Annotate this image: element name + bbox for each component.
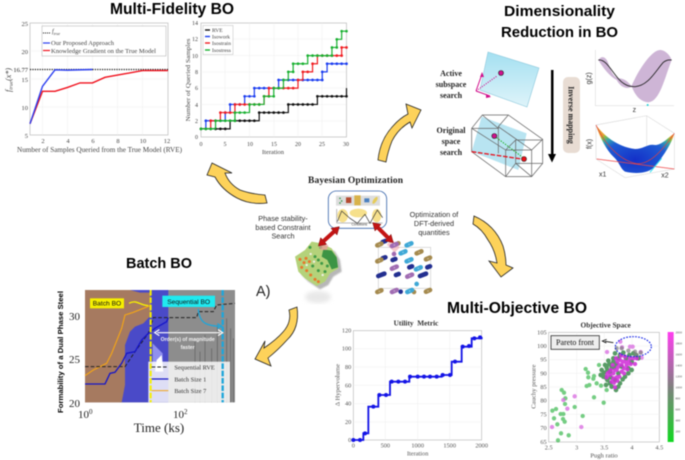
chart: objective space scatter: 65 [540, 439, 547, 446]
chart: utility metric [335, 318, 488, 458]
title: Bayesian Optimization: Bayesian Optimization [308, 176, 404, 186]
chart: objective space scatter: 90 [540, 370, 547, 377]
colorbar: 1200 [675, 374, 682, 378]
chart: f_true versus samples queried: 25 [22, 21, 28, 28]
legend: batch chart: Batch Size 7 [174, 388, 206, 395]
chart: g(z) with uncertainty band: g(z) [586, 72, 593, 84]
legend: f_true chart [42, 26, 166, 56]
chart: f_true versus samples queried: true [8, 80, 14, 90]
chart: number of queried samples: 0 [200, 142, 202, 148]
chart: formability over time: Formability of a Dual Phase Steel [56, 291, 65, 413]
colorbar: 1400 [675, 364, 682, 368]
text: optimization of DFT-derived quantities: quantities [418, 228, 450, 237]
text: order of magnitude faster: Order(s) of magnitude [161, 337, 215, 343]
chart: number of queried samples: 12 [192, 37, 198, 43]
colorbar: 600 [675, 407, 681, 411]
chart: f(x) surface: f(x) [587, 139, 594, 149]
chart: utility metric: Iteration [407, 451, 429, 458]
chart: f_true versus samples queried: 6 [91, 138, 95, 145]
box: inverse mapping: Inverse mapping [566, 86, 576, 144]
legend: queried samples chart: RVE [212, 28, 223, 34]
label: Sequential BO tag: Sequential BO [167, 299, 210, 306]
label: A): A) [256, 284, 270, 300]
label: original space search: Original [437, 126, 466, 135]
chart: f(x) surface: x1 [599, 171, 606, 178]
arrow: Pareto callout pointer [602, 339, 613, 343]
chart: formability over time [56, 290, 235, 435]
chart: number of queried samples: Number of Queried Samples [185, 38, 192, 122]
chart: number of queried samples: 5 [224, 142, 226, 148]
chart: objective space scatter: 75 [540, 411, 547, 418]
chart: f_true versus samples queried: 4 [66, 138, 70, 145]
text: optimization of DFT-derived quantities: DFT-derived [414, 219, 454, 228]
colorbar: 400 [675, 418, 681, 422]
chart: f(x) surface: x2 [661, 172, 669, 179]
chart: formability over time: 25 [69, 354, 80, 366]
chart: objective space scatter: 105 [537, 329, 547, 336]
legend: f_true chart: f [52, 29, 54, 35]
chart: formability over time: 30 [69, 311, 80, 323]
chart: objective space scatter: 3 [575, 444, 578, 451]
chart: f_true versus samples queried: Number of Samples Queried from the True Model (RVE) [17, 146, 183, 154]
box: inverse mapping [563, 77, 580, 153]
legend: f_true chart: Knowledge Gradient on the True Model [51, 49, 156, 55]
legend: f_true chart: Our Proposed Approach [51, 41, 114, 47]
chart: utility metric: 20 [345, 419, 351, 426]
colorbar: 1000 [675, 385, 682, 389]
chart: number of queried samples: 20 [295, 142, 301, 148]
chart: utility metric: Utility Metric [394, 318, 439, 327]
arrow: inverse mapping direction [548, 70, 556, 162]
chart: formability over time: 0 [89, 408, 93, 416]
chart: utility metric: 80 [345, 364, 351, 371]
chart: number of queried samples: 8 [195, 70, 198, 76]
title: Multi-Fidelity BO: Multi-Fidelity BO [110, 1, 234, 18]
arrow: to dimensionality reduction [378, 104, 421, 162]
text: optimization of DFT-derived quantities: Optimization of [410, 210, 459, 219]
figure: crystal structure [377, 241, 431, 292]
arrow: red double-headed to phase map [318, 227, 339, 246]
chart: utility metric: 40 [345, 401, 351, 408]
chart: utility metric: 0 [348, 437, 351, 444]
chart: formability over time: Time (ks) [134, 420, 184, 435]
callout: Pareto front: Pareto front [556, 338, 595, 347]
label: active subspace search: Active [440, 69, 462, 78]
chart: f_true versus samples queried: 20 [22, 49, 28, 56]
text: phase stability-based constraint search: Phase stability- [258, 214, 308, 223]
legend: batch chart: Sequential RVE [174, 364, 215, 371]
chart: objective space scatter: 95 [540, 357, 547, 364]
arrow: red double-headed to crystal [373, 223, 393, 243]
chart: utility metric: 2000 [475, 443, 488, 450]
chart: number of queried samples: 0 [195, 135, 198, 141]
legend: batch chart: Batch Size 1 [174, 376, 206, 383]
colorbar: 1800 [675, 341, 682, 345]
box: Bayesian optimization schematic: Conditions [351, 223, 368, 227]
chart: utility metric: Δ Hypervolume [335, 364, 342, 406]
diagram: original space cube [472, 115, 543, 177]
chart: number of queried samples: Iteration [262, 149, 285, 156]
chart: objective space scatter: 100 [537, 343, 547, 350]
diagram: active subspace plane [476, 52, 539, 107]
label: active subspace search: subspace [436, 80, 467, 89]
arrow: cyan to sequential line [198, 309, 222, 328]
chart: number of queried samples: 25 [319, 142, 325, 148]
chart: number of queried samples: 14 [192, 21, 198, 27]
arrow: to batch [255, 307, 298, 366]
chart: utility metric: 0 [352, 443, 355, 450]
chart: f_true versus samples queried: (x*) [4, 68, 13, 81]
chart: f_true versus samples queried: 5 [25, 133, 28, 140]
colorbar: 1600 [675, 353, 682, 357]
chart: number of queried samples [185, 21, 349, 156]
figure: phase stability map [295, 242, 342, 289]
chart: f_true versus samples queried: 10 [22, 105, 28, 112]
title: Dimensionality Reduction in BO: Dimensionality [504, 3, 616, 20]
label: Batch BO tag [90, 298, 124, 308]
label: active subspace search: search [440, 91, 463, 100]
chart: f_true versus samples queried: 10 [140, 138, 146, 145]
chart: number of queried samples: 10 [247, 142, 253, 148]
chart: objective space scatter: 80 [540, 398, 547, 405]
chart: number of queried samples: 15 [271, 142, 277, 148]
chart: utility metric: 1000 [411, 443, 424, 450]
callout: Pareto front [551, 336, 599, 349]
chart: f_true versus samples queried: f [4, 90, 13, 92]
legend: queried samples chart: Isowork [212, 34, 230, 40]
text: optimization of DFT-derived quantities [410, 210, 459, 237]
title: Multi-Objective BO: Multi-Objective BO [447, 300, 587, 317]
chart: f_true versus samples queried: 2 [41, 138, 45, 145]
label: active subspace search [436, 69, 467, 100]
title: Batch BO: Batch BO [126, 255, 192, 272]
chart: g(z) with uncertainty band: z [633, 107, 637, 114]
chart: g(z) with uncertainty band [586, 50, 674, 114]
chart: utility metric: 120 [342, 328, 351, 335]
data points: dense gray green cluster [601, 353, 638, 390]
chart: formability over time: 2 [184, 408, 188, 416]
chart: f_true versus samples queried: 8 [116, 138, 120, 145]
box: Bayesian optimization schematic [328, 191, 387, 228]
chart: number of queried samples: 10 [192, 54, 198, 60]
chart: formability over time: 20 [69, 398, 80, 410]
chart: objective space scatter: 70 [540, 425, 547, 432]
colorbar [668, 331, 682, 442]
chart: number of queried samples: 2 [195, 119, 198, 125]
chart: objective space scatter: Objective Space [581, 321, 632, 330]
arrow: order of magnitude span [155, 330, 223, 336]
chart: objective space scatter: 85 [540, 384, 547, 391]
chart: objective space scatter: 3.5 [600, 444, 608, 451]
text: phase stability-based constraint search: Search [271, 232, 295, 240]
text: order of magnitude faster: faster [181, 345, 195, 351]
chart: f_true versus samples queried: 12 [164, 138, 170, 145]
chart: formability over time: 10 [78, 409, 89, 421]
data points: sparse green [552, 365, 607, 440]
legend: f_true chart: true [54, 31, 60, 36]
chart: f_true versus samples queried: 16.77 [13, 67, 29, 74]
chart: number of queried samples: 30 [343, 142, 349, 148]
chart: utility metric: 1500 [443, 443, 456, 450]
legend: queried samples chart: Isostrain [212, 41, 231, 47]
chart: utility metric: 100 [342, 346, 351, 353]
legend: queried samples chart: Isostress [212, 48, 231, 54]
chart: utility metric: 500 [381, 443, 390, 450]
chart: objective space scatter: Cauchy pressure [530, 365, 537, 409]
text: phase stability-based constraint search: based Constraint [255, 223, 311, 232]
shadow: faint reflection of phase map [305, 291, 331, 303]
chart: f_true versus samples queried [4, 21, 183, 154]
legend: queried samples chart [203, 26, 233, 54]
data points: dense magenta cluster [607, 356, 637, 387]
arrow: yellow to batch line [129, 302, 148, 306]
label: Batch BO tag: Batch BO [93, 301, 121, 308]
title: Dimensionality Reduction in BO: Reduction in BO [501, 24, 618, 41]
chart: objective space scatter: 2.5 [545, 444, 553, 451]
label: original space search: search [440, 148, 463, 157]
chart: f_true versus samples queried: 15 [22, 77, 28, 84]
chart: objective space scatter [530, 321, 682, 460]
chart: number of queried samples: 4 [195, 103, 198, 109]
label: original space search [437, 126, 466, 157]
arrow: to multi-objective [473, 216, 513, 277]
chart: utility metric: 60 [345, 382, 351, 389]
chart: number of queried samples: 6 [195, 86, 198, 92]
arrow: to multi-fidelity [207, 163, 267, 203]
text: phase stability-based constraint search [255, 214, 311, 240]
label: Sequential BO tag [162, 296, 215, 307]
label: original space search: space [442, 137, 461, 146]
chart: objective space scatter: 4.5 [655, 444, 663, 451]
colorbar: 800 [675, 396, 681, 400]
colorbar: 2000 [675, 331, 682, 335]
colorbar: 200 [675, 429, 681, 433]
chart: objective space scatter: Pugh ratio [590, 453, 618, 460]
text: order of magnitude faster [161, 337, 215, 351]
chart: formability over time: 10 [173, 409, 184, 421]
title: Dimensionality Reduction in BO [501, 3, 618, 41]
chart: objective space scatter: 4 [630, 444, 634, 451]
chart: f(x) surface [587, 116, 674, 179]
ellipse: Pareto region [615, 337, 651, 357]
data points: sparse pink [552, 342, 642, 427]
legend: batch chart [152, 364, 215, 395]
